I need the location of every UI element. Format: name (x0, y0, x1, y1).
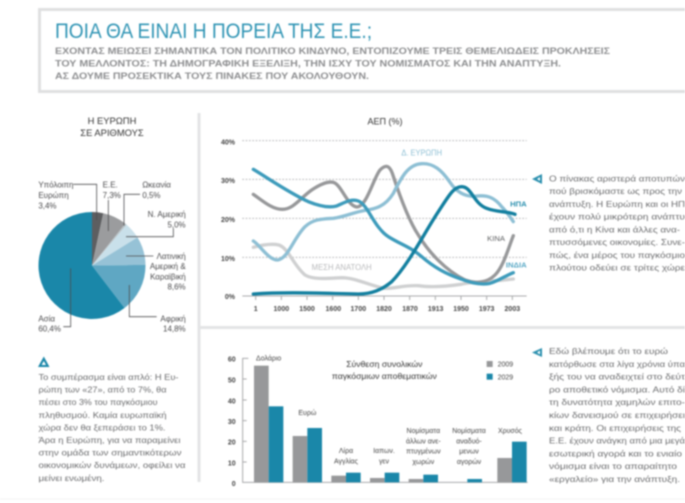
icon: left arrow for GDP commentary (532, 174, 542, 184)
y axis labels: 10% (221, 256, 236, 263)
series labels: ΚΙΝΑ (487, 234, 506, 243)
conclusion text: Το συμπέρασμα είναι απλό: Η Ευ- (38, 372, 179, 382)
y axis labels: 10 (228, 460, 236, 467)
reserves commentary text: κατόρθωσε στα λίγα χρόνια ύπα (549, 359, 685, 369)
x axis labels: 1700 (351, 306, 366, 313)
line: West Europe (253, 164, 513, 260)
conclusion text: στην ομάδα των σημαντικότερων (38, 448, 182, 458)
line: India (253, 169, 513, 284)
GDP commentary text: έχουν πολύ μικρότερη ανάπτυ (549, 212, 685, 222)
y axis labels: 30% (221, 178, 236, 185)
panel heading: ΣΕ ΑΡΙΘΜΟΥΣ (80, 127, 144, 138)
bar category labels: Ευρώ (298, 409, 317, 417)
bar chart title: παγκόσμιων αποθεματικών (332, 371, 437, 381)
series labels: ΙΝΔΙΑ (506, 261, 527, 270)
bar category labels: μενων (459, 449, 479, 456)
bar category labels: χωρών (412, 458, 435, 466)
pie labels and leader lines: Ασία (38, 315, 55, 324)
GDP commentary text: πλούτου οδεύει σε τρίτες χώρε (549, 263, 685, 273)
x axis labels: 1913 (428, 306, 444, 313)
bar category labels: Χρυσός (498, 427, 523, 435)
pie labels and leader lines: Αμερική & (150, 262, 186, 271)
y axis labels: 50 (228, 377, 236, 384)
bar category labels: Δολάριο (256, 354, 281, 362)
bar chart: global reserves (228, 354, 528, 488)
intro text: ΤΟΥ ΜΕΛΛΟΝΤΟΣ: ΤΗ ΔΗΜΟΓΡΑΦΙΚΗ ΕΞΕΛΙΞΗ, ΤΗΝ ΙΣΧΥ ΤΟΥ ΝΟΜΙΣΜΑΤΟΣ ΚΑΙ ΤΗΝ ΑΝΑΠΤΥΞΗ. (55, 58, 561, 68)
pie labels and leader lines: 3,4% (38, 201, 57, 210)
pie labels and leader lines: Ε.Ε. (103, 181, 118, 190)
pie chart (39, 212, 146, 319)
line: China (253, 166, 513, 282)
x axis labels: 2003 (505, 306, 520, 313)
reserves commentary text: ρο αποθετικό νόμισμα. Αυτό δί (549, 384, 685, 394)
y axis labels: 30 (228, 419, 236, 426)
icon: delta marker (38, 356, 50, 367)
y axis labels (221, 139, 236, 301)
legend: 2029 (498, 374, 513, 381)
legend (487, 361, 513, 381)
conclusion text: μείνει ενωμένη. (38, 473, 104, 483)
pie labels and leader lines (38, 181, 186, 334)
bar category labels: αγορών (457, 458, 482, 466)
intro text: ΕΧΟΝΤΑΣ ΜΕΙΩΣΕΙ ΣΗΜΑΝΤΙΚΑ ΤΟΝ ΠΟΛΙΤΙΚΟ ΚΙΝΔΥΝΟ, ΕΝΤΟΠΙΖΟΥΜΕ ΤΡΕΙΣ ΘΕΜΕΛΙΩΔΕΙΣ ΠΡΟΚΛΗΣΕΙΣ (55, 46, 611, 56)
x axis labels: 1 (254, 306, 258, 313)
bars 2009 (254, 366, 512, 482)
conclusion text: Άρα η Ευρώπη, για να παραμείνει (38, 435, 181, 445)
reserves commentary text: και κράτη. Οι επιχειρήσεις της (549, 423, 681, 433)
bar category labels: Λίρα (339, 447, 353, 455)
bar category labels: άλλων ανε- (406, 437, 441, 445)
conclusion text (38, 372, 186, 483)
bar category labels: πτυγμένων (406, 448, 441, 456)
x axis labels: 1500 (299, 306, 315, 313)
conclusion text: χώρα δεν θα ξεπεράσει το 1%. (38, 422, 166, 432)
y axis labels: 0% (225, 294, 236, 301)
bar category labels: αναδυό- (456, 437, 482, 445)
reserves commentary text: Εδώ βλέπουμε ότι το ευρώ (549, 346, 668, 356)
line: Middle East (253, 244, 513, 288)
y axis labels: 0 (232, 481, 236, 488)
pie labels and leader lines: 5,0% (167, 221, 186, 230)
pie labels and leader lines: 60,4% (38, 325, 61, 334)
reserves commentary text: ξής του να αναδειχτεί στο δεύτ (549, 372, 685, 382)
series labels: ΗΠΑ (510, 199, 527, 208)
series labels: ΜΕΣΗ ΑΝΑΤΟΛΗ (312, 263, 372, 272)
GDP commentary text (549, 174, 685, 273)
conclusion text: πέσει στο 3% του παγκόσμιου (38, 397, 158, 407)
pie labels and leader lines: Υπόλοιπη (38, 181, 74, 190)
x axis labels: 1870 (402, 306, 418, 313)
panel heading (80, 115, 144, 138)
bar category labels: Νομίσματα (452, 427, 486, 435)
conclusion text: οικονομικών δυνάμεων, οφείλει να (38, 460, 186, 470)
GDP commentary text: από ό,τι η Κίνα και άλλες ανα- (549, 224, 680, 234)
series labels: Δ. ΕΥΡΩΠΗ (401, 148, 442, 157)
pie labels and leader lines: 14,8% (163, 325, 186, 334)
chart title: ΑΕΠ (%) (368, 116, 402, 126)
y axis labels: 40 (228, 398, 236, 405)
reserves commentary text: «εργαλείο» για την ανάπτυξη. (549, 474, 680, 484)
x axis labels (254, 306, 520, 313)
GDP commentary text: πτυσσόμενες οικονομίες. Συνε- (549, 237, 685, 247)
reserves commentary text (549, 346, 685, 484)
reserves commentary text: κίων δανεισμού σε επιχειρήσει (549, 410, 685, 420)
bar chart title: Σύνθεση συνολικών (346, 359, 422, 369)
bar category labels: Ιαπων. (373, 448, 395, 455)
GDP commentary text: ανάπτυξη. Η Ευρώπη και οι ΗΠ (549, 199, 685, 209)
pie labels and leader lines: Λατινική (157, 252, 186, 261)
y axis labels: 40% (221, 139, 236, 146)
pie labels and leader lines: Ευρώπη (38, 191, 69, 200)
bars 2029 (269, 406, 527, 482)
intro text (55, 46, 611, 81)
reserves commentary text: τη δυνατότητα χαμηλών επιτο- (549, 397, 685, 407)
bar chart title (332, 359, 437, 381)
y axis labels: 20 (228, 440, 236, 447)
pie labels and leader lines: Ωκεανία (142, 181, 171, 190)
pie labels and leader lines: 7,3% (103, 191, 121, 200)
x axis labels: 1950 (453, 306, 469, 313)
line chart: GDP share (221, 116, 527, 313)
line: USA (253, 187, 515, 294)
conclusion text: πληθυσμού. Καμία ευρωπαϊκή (38, 410, 167, 420)
pie labels and leader lines: 8,6% (167, 282, 186, 291)
y axis labels (228, 357, 236, 488)
panel heading: Η ΕΥΡΩΠΗ (88, 115, 136, 126)
x axis labels: 1600 (326, 306, 341, 313)
icon: left arrow for reserves commentary (532, 348, 542, 357)
pie labels and leader lines: Καραϊβική (150, 272, 186, 281)
x axis labels: 1820 (376, 306, 392, 313)
pie labels and leader lines: Ν. Αμερική (148, 210, 186, 219)
reserves commentary text: εσωτερική αγορά και το ενιαίο (549, 448, 682, 458)
x axis labels: 1000 (274, 306, 289, 313)
reserves commentary text: νόμισμα είναι το απαραίτητο (549, 461, 677, 471)
panel: Europe in numbers (38, 115, 186, 483)
y axis labels: 20% (221, 217, 236, 224)
pie labels and leader lines: Αφρική (160, 315, 186, 324)
header panel (40, 10, 685, 92)
bar category labels: Αγγλίας (334, 458, 359, 466)
legend: 2009 (498, 362, 513, 369)
intro text: ΑΣ ΔΟΥΜΕ ΠΡΟΣΕΚΤΙΚΑ ΤΟΥΣ ΠΙΝΑΚΕΣ ΠΟΥ ΑΚΟΛΟΥΘΟΥΝ. (55, 71, 369, 81)
bar category labels: γεν (379, 459, 390, 466)
bar category labels: Νομίσματα (407, 427, 440, 435)
y axis labels: 60 (228, 357, 236, 364)
GDP commentary text: πού βρισκόμαστε ως προς την (549, 186, 682, 196)
pie labels and leader lines: 0,5% (142, 191, 161, 200)
x axis labels: 1973 (479, 306, 495, 313)
bar category labels (256, 354, 523, 466)
title: ΠΟΙΑ ΘΑ ΕΙΝΑΙ Η ΠΟΡΕΙΑ ΤΗΣ Ε.Ε.; (55, 19, 372, 43)
series labels (312, 148, 527, 272)
GDP commentary text: Ο πίνακας αριστερά αποτυπών (549, 174, 685, 184)
conclusion text: ρώπη των «27», από το 7%, θα (38, 385, 167, 395)
GDP commentary text: πώς, ένα μέρος του παγκόσμιο (549, 250, 685, 260)
reserves commentary text: Ε.Ε. έχουν ανάγκη από μια μεγά (549, 436, 685, 446)
